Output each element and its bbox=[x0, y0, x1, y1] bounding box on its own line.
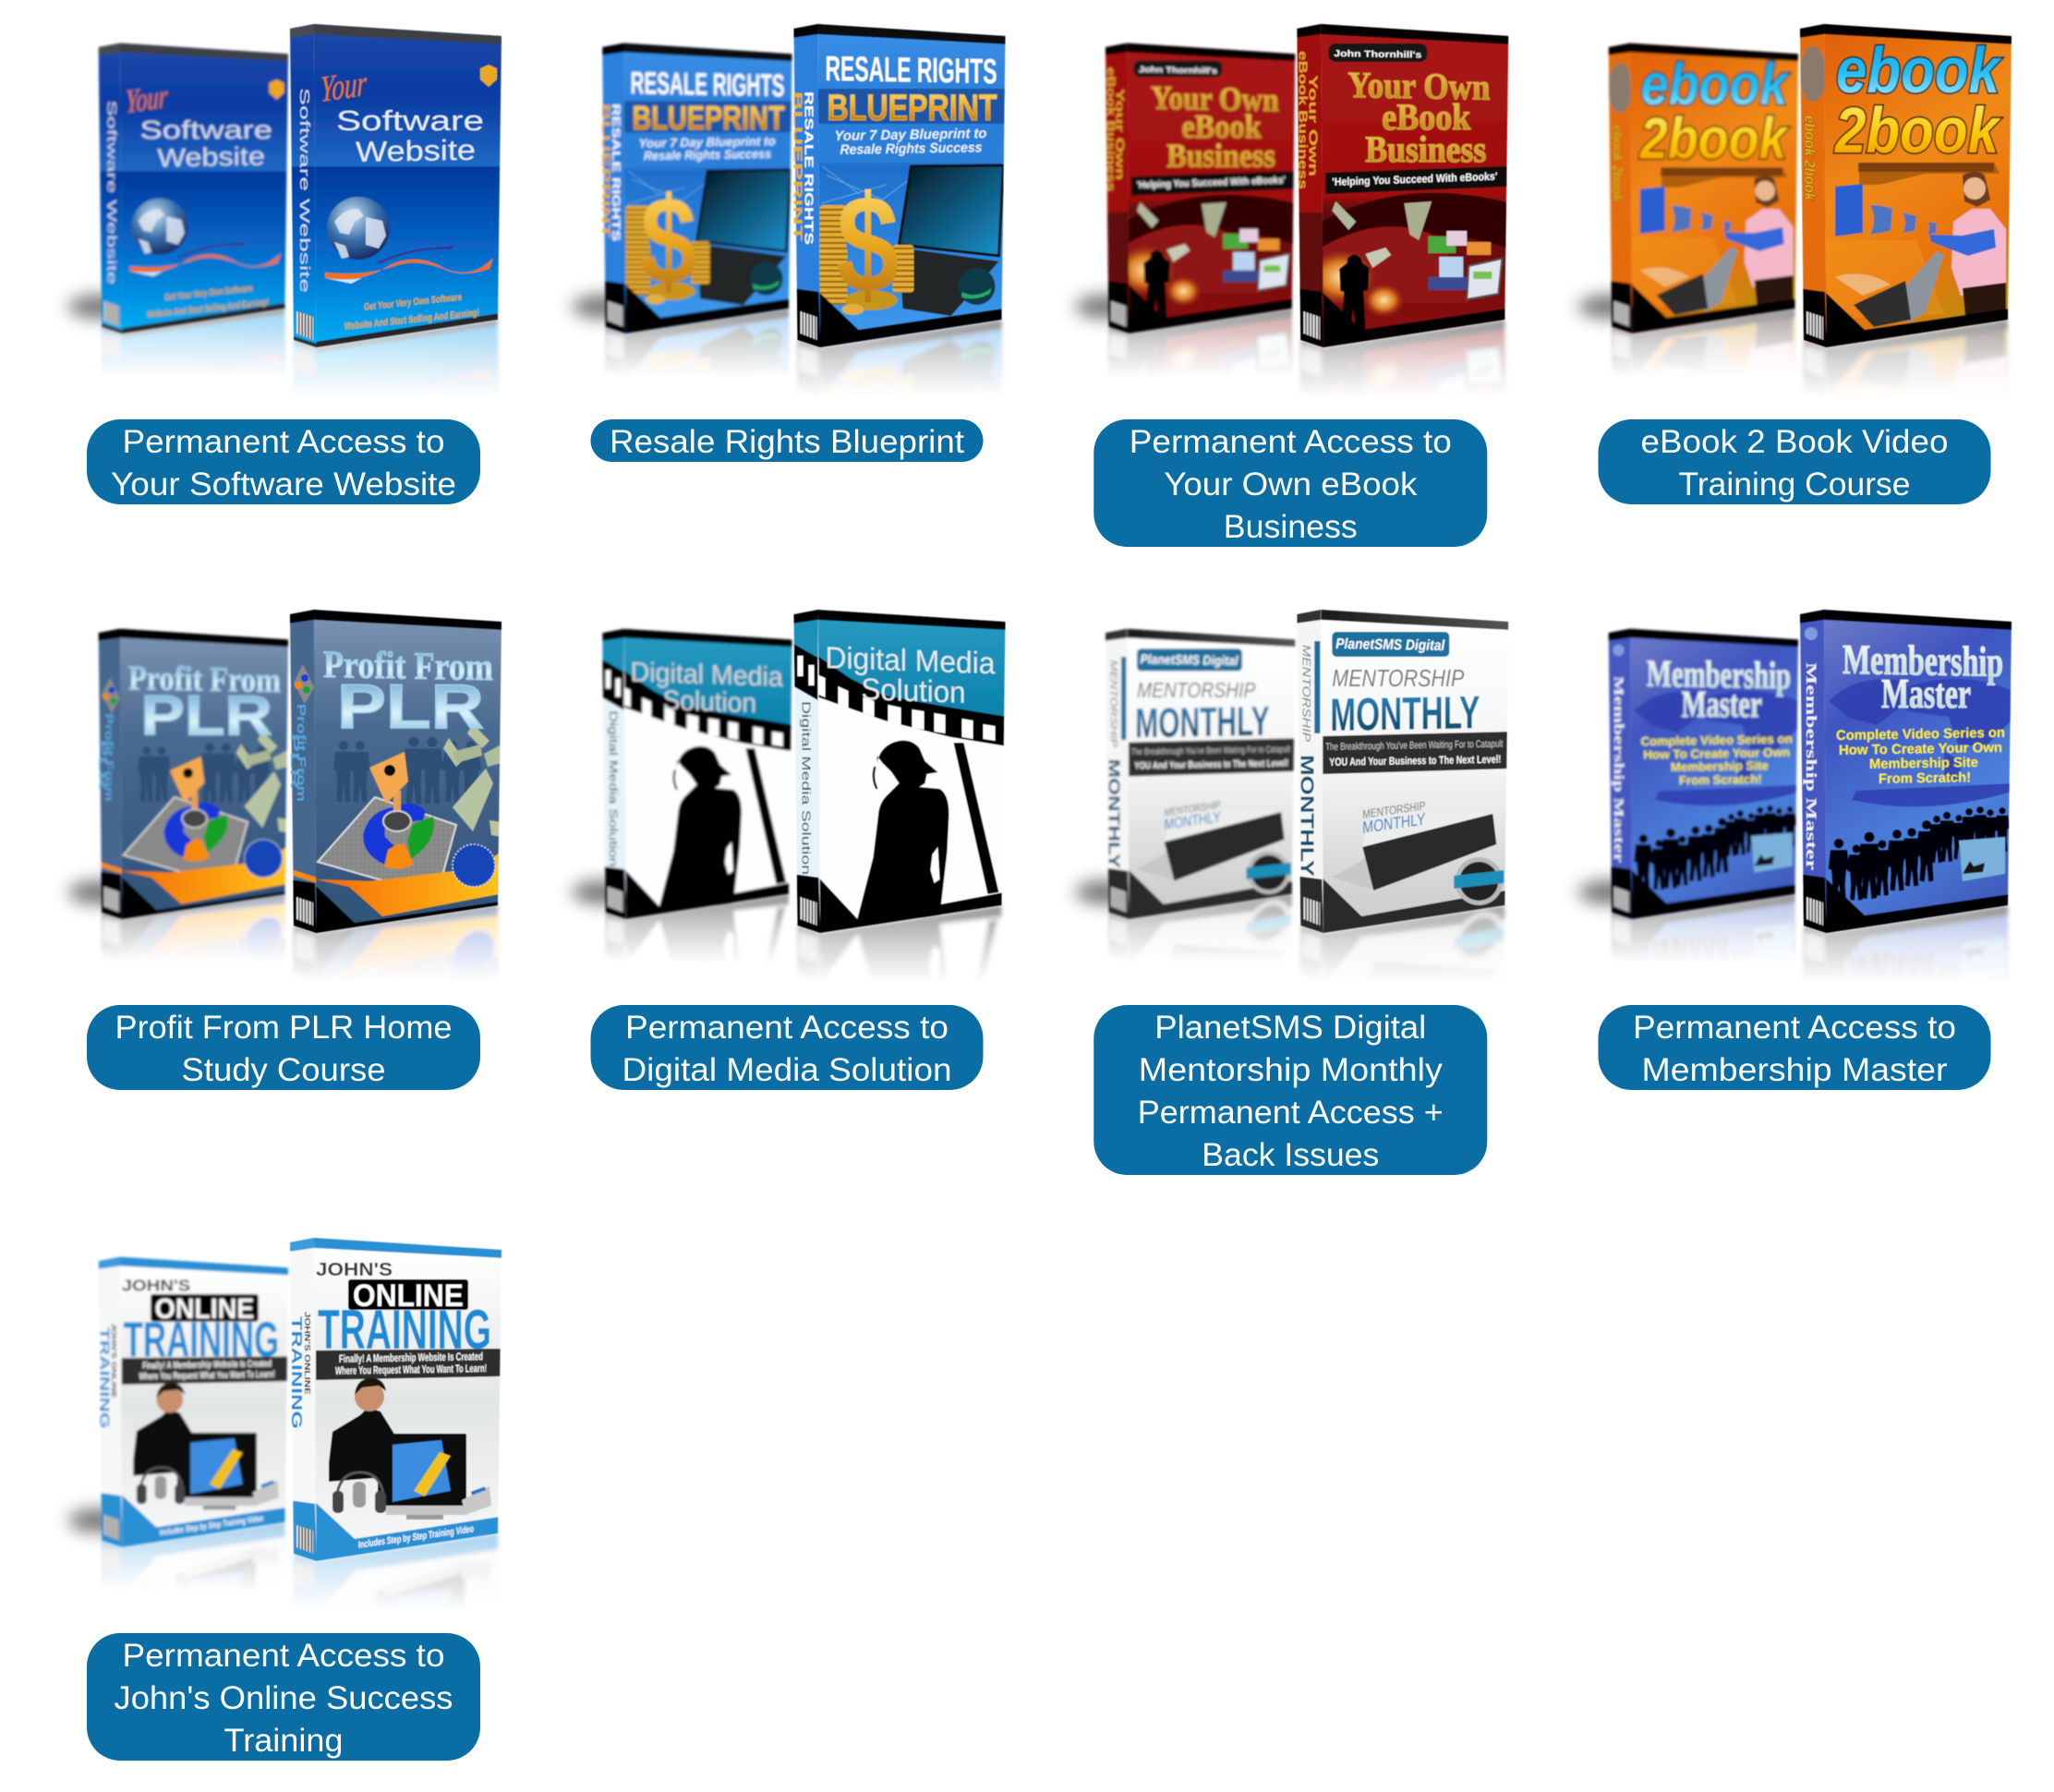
front membership box: How To Create Your Own bbox=[1839, 740, 2002, 758]
caption pill: Mentorship Monthly bbox=[1139, 1052, 1443, 1088]
back blueprint box: RESALE RIGHTS bbox=[631, 66, 784, 103]
back mentorship box: YOU And Your Business to The Next Level! bbox=[1134, 757, 1288, 771]
caption pill: Training bbox=[224, 1723, 344, 1759]
back blueprint box: Your 7 Day Blueprint to bbox=[639, 134, 776, 151]
back box reflection bbox=[95, 1492, 294, 1647]
product 6: Digital Media Solution bbox=[563, 609, 1007, 1090]
back box reflection bbox=[1610, 893, 1797, 957]
caption pill: Permanent Access + bbox=[1138, 1095, 1444, 1131]
floor shadow bbox=[573, 295, 635, 319]
back membership box: Membership bbox=[1647, 652, 1791, 696]
front blueprint box bbox=[791, 18, 1012, 351]
floor shadow bbox=[573, 880, 635, 904]
front training box: TRAINING bbox=[288, 1316, 304, 1429]
front training box: Finally! A Membership Website Is Created bbox=[339, 1350, 483, 1365]
caption pill: Digital Media Solution bbox=[622, 1052, 951, 1088]
back box reflection bbox=[100, 893, 287, 957]
front ebook box: Business bbox=[1365, 128, 1486, 170]
front ebook box bbox=[1293, 18, 1515, 351]
back training box: ONLINE bbox=[155, 1293, 254, 1325]
front mentorship box: The Breakthrough You've Been Waiting For to Catapult bbox=[1325, 739, 1503, 753]
caption pill bbox=[1598, 1005, 1991, 1090]
back software box: Website And Start Selling And Earning! bbox=[148, 297, 269, 321]
front software box: Get Your Very Own Software bbox=[364, 292, 462, 313]
front blueprint box: $ bbox=[837, 166, 900, 321]
caption pill bbox=[87, 1633, 480, 1761]
front ebook box: eBook Business bbox=[1296, 51, 1310, 189]
front box reflection bbox=[795, 903, 1005, 975]
back box reflection bbox=[1610, 308, 1797, 371]
back mentorship box: MONTHLY bbox=[1106, 759, 1124, 868]
caption pill: John's Online Success bbox=[115, 1680, 453, 1716]
front PLR box bbox=[286, 604, 508, 944]
front training box: JOHN'S ONLINE bbox=[303, 1312, 311, 1396]
front training box: Includes Step by Step Training Video bbox=[358, 1523, 474, 1551]
front box reflection bbox=[1801, 319, 2011, 390]
front mentorship box: MONTHLY bbox=[1362, 810, 1425, 837]
front box reflection bbox=[292, 319, 501, 390]
back blueprint box: BLUEPRINT bbox=[599, 103, 611, 238]
back blueprint box: $ bbox=[640, 171, 696, 310]
caption pill bbox=[591, 1005, 983, 1090]
back software box: Your bbox=[126, 78, 168, 120]
back software box: Website bbox=[157, 141, 265, 172]
front box reflection bbox=[286, 1499, 508, 1672]
caption pill: Permanent Access to bbox=[122, 1638, 445, 1674]
back ebook2book box: 2book bbox=[1639, 106, 1789, 171]
caption pill: Your Software Website bbox=[111, 466, 456, 502]
product 9: John's Online Training bbox=[68, 1232, 508, 1761]
front ebook box: John Thornhill's bbox=[1334, 49, 1422, 61]
product 5: Profit From PLR bbox=[68, 604, 508, 1265]
floor shadow bbox=[1075, 295, 1138, 319]
back PLR box bbox=[95, 624, 294, 929]
back blueprint box: Resale Rights Success bbox=[644, 147, 772, 163]
product 7: PlanetSMS Mentorship Monthly bbox=[1066, 609, 1509, 1175]
product 8: Membership Master bbox=[1569, 609, 2012, 1090]
caption pill: Your Own eBook bbox=[1164, 466, 1418, 502]
back ebook box bbox=[1102, 38, 1301, 337]
back digital media box bbox=[599, 624, 798, 923]
back membership box: Master bbox=[1682, 683, 1762, 725]
floor shadow bbox=[68, 1508, 131, 1532]
back training box: TRAINING bbox=[124, 1312, 279, 1367]
caption pill bbox=[87, 419, 480, 504]
floor shadow bbox=[68, 295, 131, 319]
back box reflection bbox=[1106, 308, 1295, 371]
front digital media box: Digital Media bbox=[826, 640, 996, 680]
caption pill: eBook 2 Book Video bbox=[1640, 424, 1949, 460]
product 3: Your Own eBook Business bbox=[1075, 18, 1515, 683]
floor shadow bbox=[1578, 295, 1641, 319]
caption pill: PlanetSMS Digital bbox=[1154, 1010, 1426, 1046]
front mentorship box bbox=[1293, 604, 1515, 938]
front software box: Software bbox=[336, 104, 484, 137]
back training box: JOHN'S ONLINE bbox=[110, 1323, 117, 1398]
caption pill: Permanent Access to bbox=[122, 424, 445, 460]
front PLR box: Profit From bbox=[323, 644, 493, 689]
back training box: Finally! A Membership Website Is Created bbox=[142, 1358, 272, 1372]
back training box bbox=[95, 1252, 294, 1551]
front membership box: From Scratch! bbox=[1879, 769, 1971, 787]
back membership box: From Scratch! bbox=[1679, 772, 1762, 787]
back PLR box: Profit From bbox=[103, 713, 115, 801]
front blueprint box: Resale Rights Success bbox=[840, 139, 983, 158]
front software box bbox=[286, 18, 508, 351]
caption pill: Permanent Access to bbox=[1130, 424, 1452, 460]
back training box: JOHN'S bbox=[122, 1276, 190, 1294]
back membership box: How To Create Your Own bbox=[1643, 745, 1790, 762]
back mentorship box bbox=[1102, 624, 1301, 924]
caption pill: Study Course bbox=[181, 1052, 386, 1088]
back membership box: Complete Video Series on bbox=[1641, 732, 1793, 748]
front box reflection bbox=[1801, 904, 2011, 975]
back mentorship box: The Breakthrough You've Been Waiting For to Catapult bbox=[1131, 745, 1290, 757]
back software box: Get Your Very Own Software bbox=[164, 284, 253, 303]
caption pill bbox=[1598, 419, 1991, 504]
front ebook2book box: 2book bbox=[1833, 94, 2001, 166]
back mentorship box: MENTORSHIP bbox=[1137, 678, 1256, 702]
back mentorship box: MENTORSHIP bbox=[1165, 799, 1221, 819]
caption pill: Resale Rights Blueprint bbox=[610, 424, 964, 460]
caption pill: Training Course bbox=[1679, 466, 1910, 502]
back membership box: Membership Master bbox=[1611, 676, 1625, 864]
back ebook box: Business bbox=[1166, 137, 1275, 174]
back PLR box: PLR bbox=[140, 684, 272, 747]
back box reflection bbox=[100, 309, 287, 371]
front box reflection bbox=[292, 904, 501, 975]
product 4: eBook 2 Book bbox=[1578, 18, 2018, 680]
back membership box: Membership Site bbox=[1671, 758, 1769, 774]
front membership box: Master bbox=[1881, 670, 1971, 717]
front blueprint box: RESALE RIGHTS bbox=[802, 91, 816, 245]
front blueprint box: BLUEPRINT bbox=[791, 91, 805, 241]
caption pill: Business bbox=[1224, 509, 1358, 545]
front blueprint box: RESALE RIGHTS bbox=[826, 50, 997, 91]
front software box: Software Website bbox=[296, 88, 312, 293]
caption pill: Back Issues bbox=[1202, 1137, 1379, 1173]
back membership box bbox=[1605, 624, 1804, 923]
caption pill: Profit From PLR Home bbox=[115, 1010, 453, 1046]
front software box: Website And Start Selling And Earning! bbox=[344, 308, 479, 333]
back ebook2book box: ebook bbox=[1641, 53, 1790, 117]
back ebook box: Your Own bbox=[1114, 89, 1126, 180]
back blueprint box: RESALE RIGHTS bbox=[610, 103, 622, 242]
front blueprint box: BLUEPRINT bbox=[828, 88, 997, 128]
back PLR box: Profit From bbox=[128, 659, 281, 700]
back blueprint box bbox=[599, 38, 798, 337]
front box reflection bbox=[795, 319, 1005, 390]
caption pill bbox=[1093, 419, 1487, 547]
back PLR box: PLR bbox=[97, 740, 109, 791]
front blueprint box: Your 7 Day Blueprint to bbox=[835, 126, 986, 144]
back box reflection bbox=[604, 308, 791, 371]
back digital media box: Solution bbox=[663, 685, 756, 719]
back software box bbox=[95, 38, 294, 337]
back ebook box: eBook Business bbox=[1105, 67, 1117, 191]
back mentorship box: PlanetSMS Digital bbox=[1141, 652, 1238, 669]
product 2: Resale Rights Blueprint bbox=[573, 18, 1012, 680]
caption pill: Permanent Access to bbox=[625, 1010, 948, 1046]
front digital media box: Digital Media Solution bbox=[800, 701, 813, 875]
front ebook box: 'Helping You Succeed With eBooks' bbox=[1332, 170, 1497, 188]
back training box: TRAINING bbox=[96, 1327, 111, 1429]
caption pill: Membership Master bbox=[1642, 1052, 1948, 1088]
front ebook2book box: ebook 2book bbox=[1801, 115, 1818, 201]
front software box: Your bbox=[320, 62, 367, 110]
front membership box bbox=[1796, 604, 2018, 937]
back mentorship box: MENTORSHIP bbox=[1107, 660, 1118, 748]
front software box: Website bbox=[356, 134, 476, 168]
front membership box: Membership Master bbox=[1803, 662, 1818, 870]
front membership box: Membership Site bbox=[1869, 755, 1978, 772]
back training box: Where You Request What You Want To Learn! bbox=[139, 1369, 275, 1383]
front ebook box: Your Own bbox=[1306, 75, 1320, 176]
front training box: Where You Request What You Want To Learn! bbox=[335, 1362, 487, 1377]
back digital media box: Digital Media Solution bbox=[607, 711, 619, 866]
caption pill: Permanent Access to bbox=[1633, 1010, 1956, 1046]
front ebook box: Your Own bbox=[1347, 64, 1490, 108]
front PLR box: PLR bbox=[337, 672, 484, 742]
back ebook box: eBook bbox=[1181, 108, 1262, 145]
front mentorship box: MENTORSHIP bbox=[1362, 798, 1426, 821]
back mentorship box: MONTHLY bbox=[1135, 697, 1270, 746]
front digital media box: Solution bbox=[861, 672, 966, 709]
floor shadow bbox=[1075, 880, 1138, 904]
back software box: Software Website bbox=[105, 101, 119, 285]
back digital media box: Digital Media bbox=[631, 657, 783, 693]
front mentorship box: PlanetSMS Digital bbox=[1335, 636, 1445, 654]
front ebook2book box bbox=[1796, 18, 2018, 351]
front box reflection bbox=[1299, 319, 1507, 390]
caption pill bbox=[1093, 1005, 1487, 1175]
floor shadow bbox=[1578, 880, 1641, 904]
caption pill bbox=[87, 1005, 480, 1090]
front ebook box: eBook bbox=[1382, 96, 1471, 138]
back ebook box: 'Helping You Succeed With eBooks' bbox=[1137, 175, 1286, 191]
front mentorship box: MONTHLY bbox=[1330, 686, 1480, 741]
front digital media box bbox=[791, 604, 1012, 937]
back mentorship box: MONTHLY bbox=[1165, 808, 1221, 833]
front mentorship box: YOU And Your Business to The Next Level! bbox=[1329, 753, 1501, 769]
back training box: Includes Step by Step Training Video bbox=[160, 1514, 263, 1538]
product 1: Your Software Website bbox=[68, 18, 508, 680]
back box reflection bbox=[1106, 894, 1294, 955]
front PLR box: PLR bbox=[288, 733, 302, 790]
front training box: TRAINING bbox=[318, 1299, 491, 1361]
front mentorship box: MENTORSHIP bbox=[1332, 664, 1465, 692]
front training box: ONLINE bbox=[353, 1278, 464, 1314]
back ebook2book box: ebook 2book bbox=[1609, 126, 1625, 202]
back ebook2book box bbox=[1605, 38, 1804, 337]
front mentorship box: MENTORSHIP bbox=[1299, 645, 1312, 742]
back blueprint box: BLUEPRINT bbox=[632, 100, 785, 137]
floor shadow bbox=[68, 880, 131, 904]
front training box bbox=[286, 1232, 508, 1565]
front ebook2book box: ebook bbox=[1836, 34, 2002, 106]
front mentorship box: MONTHLY bbox=[1296, 755, 1316, 878]
back software box: Software bbox=[140, 115, 272, 144]
back box reflection bbox=[604, 894, 791, 957]
back ebook box: Your Own bbox=[1151, 79, 1278, 118]
front training box: JOHN'S bbox=[316, 1260, 393, 1280]
front box reflection bbox=[1299, 905, 1507, 974]
front PLR box: Profit From bbox=[295, 704, 308, 802]
back ebook box: John Thornhill's bbox=[1139, 65, 1217, 76]
front membership box: Complete Video Series on bbox=[1836, 725, 2005, 744]
